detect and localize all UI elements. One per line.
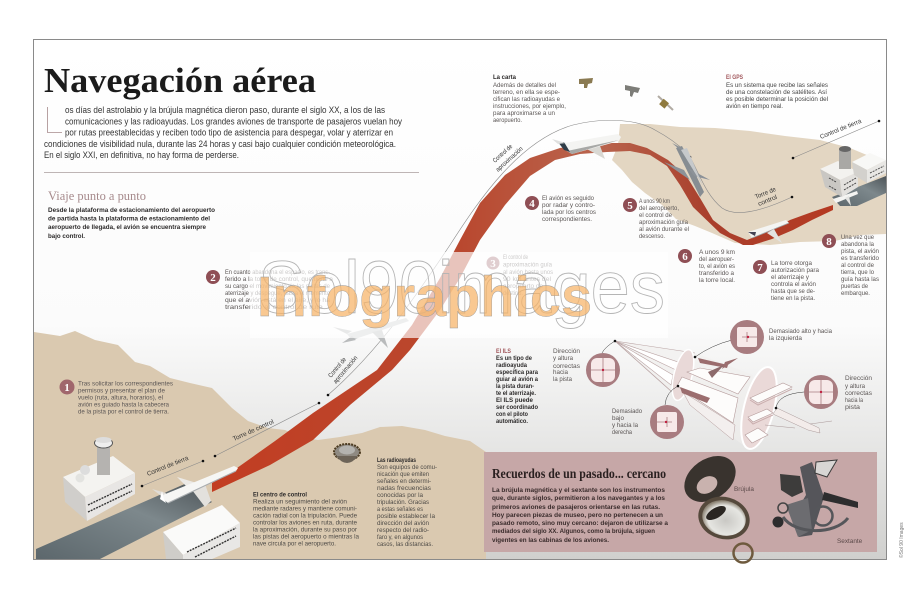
- route labels: aproximación: [332, 354, 360, 385]
- gauge labels: pista: [845, 405, 861, 411]
- step 5: aproximación guía: [639, 220, 689, 226]
- land: lower left: [34, 331, 486, 559]
- step 8: 8: [826, 236, 832, 248]
- text: el ils: automático.: [496, 419, 528, 425]
- subheading text: bajo control.: [48, 234, 85, 240]
- text: las radioayudas: a estas señales es: [377, 507, 423, 513]
- step 4: por radar y contro-: [542, 203, 595, 209]
- control centre building: upper right: [820, 146, 858, 197]
- intro text: comunicaciones y las radioayudas. Los grandes aviones de transporte de pasajeros vuelan hoy: [65, 116, 403, 126]
- text: la carta: cifican las radioayudas e: [493, 97, 561, 103]
- step 1: de la pista por el control de tierra.: [78, 410, 169, 416]
- text: las radioayudas: casos, las distancias.: [377, 542, 433, 548]
- runway: upper right: [832, 176, 886, 206]
- text: el gps: [726, 75, 828, 110]
- step 4: correspondientes.: [542, 217, 592, 223]
- step 1: avión es guiado hasta la cabecera: [78, 402, 170, 408]
- text: las radioayudas: conocidas por la: [377, 493, 424, 499]
- text: el ils: con el piloto: [496, 412, 528, 418]
- route labels: Control de: [327, 356, 348, 379]
- step 8: [822, 234, 880, 297]
- step 8: Una vez que: [841, 235, 875, 241]
- step 1: [60, 380, 173, 416]
- ILS beam diagram: [602, 340, 832, 452]
- route labels: Control de tierra: [146, 455, 190, 478]
- text: las radioayudas: Son equipos de comu-: [377, 465, 437, 471]
- text: el gps: El GPS: [726, 75, 743, 81]
- step 7: el aterrizaje y: [771, 275, 809, 281]
- text: el ils: [496, 349, 539, 425]
- gauge labels: Dirección: [553, 349, 580, 355]
- plane: landing: [748, 220, 789, 243]
- land: upper right: [612, 124, 886, 245]
- flight path ribbon: [212, 143, 833, 492]
- panel body text: vigentes en las cabinas de los aviones.: [492, 537, 609, 544]
- gauge labels: hacia la: [845, 398, 864, 404]
- intro text: En el siglo XXI, en definitiva, no hay forma de perderse.: [44, 150, 239, 160]
- step 7: tiene en la pista.: [771, 296, 815, 302]
- step 5: 5: [627, 200, 633, 212]
- watermark veil: [250, 252, 668, 338]
- map and route illustration: [34, 78, 886, 559]
- text: las radioayudas: nicación que emiten: [377, 472, 429, 478]
- text: el ils: radioayuda: [496, 363, 528, 369]
- step 2: ferido a la torre de control, que tiene a: [225, 277, 334, 283]
- panel body text: pasado remoto, sino muy cercano: dejaron de utilizarse a: [492, 520, 669, 527]
- gauge labels: Demasiado: [612, 409, 643, 415]
- step 3: El control de: [503, 255, 528, 261]
- text: la carta: aeropuerto.: [493, 118, 522, 124]
- text: el centro de control: Realiza un seguimiento del avión: [253, 500, 347, 506]
- text: el gps: de una constelación de satélites. Así: [726, 90, 827, 96]
- plane: lower left: [152, 466, 238, 507]
- step 4: lada por los centros: [542, 210, 596, 216]
- gauge labels: y altura: [845, 384, 866, 390]
- gauge: too low and right: [650, 405, 684, 439]
- step 8: puertas de: [841, 284, 869, 290]
- gauge labels: la izquierda: [769, 336, 803, 342]
- step 8: embarque.: [841, 291, 870, 297]
- step 1: permisos y presentar el plan de: [78, 388, 166, 394]
- subheading text: Desde la plataforma de estacionamiento del aeropuerto: [48, 208, 215, 214]
- step 4: El avión es seguido: [542, 196, 595, 202]
- step 7: La torre otorga: [771, 261, 813, 267]
- panel body text: La brújula magnética y el sextante son los instrumentos: [492, 487, 666, 494]
- subheading text: aeropuerto de llegada, el avión se encuentra siempre: [48, 225, 207, 231]
- text: la carta: para aproximarse a un: [493, 111, 555, 117]
- step 2: transferido al control de ruta.: [225, 305, 325, 311]
- panel heading: Recuerdos de un pasado... cercano: [492, 467, 666, 482]
- text: las radioayudas: señales en determi-: [377, 479, 431, 485]
- route labels: control: [757, 194, 778, 208]
- step 3: al avión hasta unos: [503, 270, 553, 276]
- step 3: 3: [490, 258, 496, 270]
- text: las radioayudas: dirección del avión: [377, 521, 429, 527]
- watermark: sol90images: Sol90images: [258, 246, 665, 329]
- step 8: abandona la: [841, 242, 875, 248]
- step 6: [678, 249, 735, 284]
- step 6: to, el avión es: [699, 264, 735, 270]
- step 1: Tras solicitar los correspondientes: [78, 382, 173, 388]
- text: el ils: El ILS puede: [496, 398, 534, 404]
- subheading text: de partida hasta la plataforma de estacionamiento del: [48, 216, 210, 222]
- text: las radioayudas: [377, 458, 437, 548]
- step 3: aeropuerto de: [503, 284, 544, 290]
- step 8: es transferido: [841, 256, 880, 262]
- step 4: 4: [529, 198, 535, 210]
- gauge labels: derecha: [612, 430, 633, 436]
- step 8: tierra, que lo: [841, 270, 875, 276]
- step 5: A unos 90 km: [639, 199, 670, 205]
- step 4: [525, 196, 596, 223]
- step 5: [623, 198, 689, 240]
- sextant: [772, 460, 858, 537]
- satellites: [579, 78, 673, 110]
- gauge labels: y hacia la: [612, 423, 639, 429]
- title: Navegación aérea: [44, 61, 316, 100]
- step 2: En cuanto abandona el espacio, es trans-: [225, 270, 330, 276]
- compass: [676, 447, 755, 562]
- plane: descent: [664, 143, 710, 197]
- route labels: Torre de control: [232, 419, 275, 443]
- text: la carta: Además de detalles del: [493, 83, 556, 89]
- step 5: del aeropuerto,: [639, 206, 679, 212]
- step 3: 90 km antes del: [503, 277, 551, 283]
- step 7: controla el avión: [771, 282, 816, 288]
- step 2: 2: [210, 272, 216, 284]
- gauge: too high and left: [730, 320, 764, 354]
- route labels: Torre de: [754, 186, 778, 201]
- gauge labels: bajo: [612, 416, 625, 422]
- step 6: la torre local.: [699, 278, 735, 284]
- radio beacon dish: [334, 444, 360, 463]
- text: las radioayudas: Las radioayudas: [377, 458, 417, 464]
- panel body text: [492, 487, 669, 544]
- control centre building: lower left: [63, 437, 135, 521]
- route labels: aproximación: [495, 145, 525, 173]
- photo credit: ©Sol 90 Images: [898, 522, 905, 558]
- text: las radioayudas: faro y, en algunos: [377, 535, 423, 541]
- intro text: condiciones de visibilidad nula, durante las 24 horas y casi bajo cualquier condición meteorológica.: [44, 139, 396, 149]
- text: el centro de control: controlar los aviones en ruta, durante: [253, 520, 358, 526]
- step 2: que el avión está en el aire, y lo ha: [225, 298, 331, 304]
- heading: viaje punto a punto: Viaje punto a punto: [48, 188, 146, 203]
- route labels: [146, 118, 863, 478]
- sextant label: Sextante: [837, 538, 863, 545]
- step 6: del aeropuer-: [699, 257, 734, 263]
- step 2: su cargo el movimiento de las pistas de: [225, 284, 331, 290]
- text: la carta: La carta: [493, 75, 517, 81]
- text: el ils: específica para: [496, 370, 539, 376]
- route labels: Control de: [492, 143, 514, 164]
- gauge labels: la pista: [553, 377, 573, 383]
- text: el centro de control: [253, 492, 360, 548]
- text: el ils: la pista duran-: [496, 384, 534, 390]
- step 8: guía hasta las: [841, 277, 879, 283]
- text: el centro de control: nave circula por el aeropuerto.: [253, 542, 336, 548]
- gauge labels: correctas: [845, 391, 872, 397]
- step 2: aterrizaje y despegue, hasta el momento: [225, 291, 331, 297]
- drop cap L: [48, 107, 62, 132]
- gauge labels: [553, 329, 872, 436]
- text: las radioayudas: tripulación. Gracias: [377, 500, 429, 506]
- step 8: pista, el avión: [841, 249, 879, 255]
- text: el ils: Es un tipo de: [496, 356, 533, 362]
- panel body text: mediados del siglo XX. Algunos, como la brújula, siguen: [492, 528, 655, 535]
- panel body text: que, durante siglos, permitieron a los navegantes y a los: [492, 495, 666, 502]
- panel: recuerdos de un pasado: [484, 447, 877, 562]
- panel body text: primeros aviones de pasajeros orientarse en las rutas.: [492, 504, 660, 511]
- runway: lower left: [36, 483, 212, 559]
- text: el gps: Es un sistema que recibe las señales: [726, 83, 828, 89]
- step 2: [206, 270, 334, 311]
- step 3: destino.: [503, 291, 523, 297]
- step 1: vuelo (ruta, altura, horarios), el: [78, 396, 163, 402]
- text: el ils: te el aterrizaje.: [496, 391, 536, 397]
- route dots: [141, 120, 880, 487]
- text: el ils: El ILS: [496, 349, 511, 355]
- text: las radioayudas: posible establecer la: [377, 514, 436, 520]
- text: el ils: ser coordinado: [496, 405, 538, 411]
- text: el gps: es posible determinar la posición del: [726, 97, 828, 103]
- text: el centro de control: El centro de control: [253, 492, 307, 498]
- step 7: hasta que se de-: [771, 289, 815, 295]
- watermark: infographics: Infographics: [257, 265, 592, 329]
- subheading text: [48, 208, 215, 240]
- gauge: correct direction right: [804, 375, 838, 409]
- gauge labels: Demasiado alto y hacia: [769, 329, 833, 335]
- step 5: el control de: [639, 213, 673, 219]
- plane: mid climb: [333, 318, 409, 348]
- plane: cruise: [552, 134, 621, 159]
- text: la carta: terreno, en ella se espe-: [493, 90, 560, 96]
- step 5: descenso.: [639, 234, 665, 240]
- step 8: al control de: [841, 263, 875, 269]
- text: el centro de control: mediante radares y mantiene comuni-: [253, 506, 357, 512]
- gauge labels: y altura: [553, 356, 574, 362]
- step 6: transferido a: [699, 271, 735, 277]
- text: las radioayudas: nadas frecuencias: [377, 486, 431, 492]
- text: el centro de control: la aproximación, durante su paso por: [253, 528, 357, 534]
- text: las radioayudas: respecto del radio-: [377, 528, 429, 534]
- route labels: Control de tierra: [819, 118, 863, 141]
- plane: taxi upper right: [833, 191, 858, 206]
- intro text: por rutas preestablecidas y reciben todo tipo de asistencia para despegar, volar y aterrizar en: [65, 128, 393, 138]
- text: el centro de control: las pistas del aeropuerto o mientras la: [253, 534, 360, 540]
- step 7: [753, 260, 820, 302]
- text: el centro de control: cación radial con la tripulación. Puede: [253, 514, 358, 520]
- gauge labels: correctas: [553, 364, 580, 370]
- text: la carta: instrucciones, por ejemplo,: [493, 104, 566, 110]
- step 5: al avión durante el: [639, 227, 689, 233]
- step 7: autorización para: [771, 268, 820, 274]
- gauge labels: Dirección: [845, 376, 872, 382]
- dotted line: approach route: [142, 120, 879, 486]
- text: el gps: avión en tiempo real.: [726, 104, 783, 110]
- step 6: 6: [682, 251, 688, 263]
- step 3: aproximación guía: [503, 262, 553, 268]
- panel body text: Hoy parecen piezas de museo, pero no pertenecen a un: [492, 512, 663, 519]
- gauge: correct direction left: [586, 353, 620, 387]
- step 3: [486, 255, 553, 297]
- intro text: os días del astrolabio y la brújula magnética dieron paso, durante el siglo XX, a los de las: [65, 105, 386, 115]
- terminal building: upper right: [852, 153, 886, 183]
- text: la carta: [493, 75, 566, 124]
- step 1: 1: [64, 382, 70, 394]
- step 6: A unos 9 km: [699, 250, 735, 256]
- compass label: Brújula: [734, 486, 754, 493]
- gauge labels: hacia: [553, 370, 569, 376]
- intro text: [44, 105, 403, 160]
- terminal building: lower left: [163, 505, 240, 559]
- step 7: 7: [757, 262, 763, 274]
- text: el ils: guiar al avión a: [496, 377, 539, 383]
